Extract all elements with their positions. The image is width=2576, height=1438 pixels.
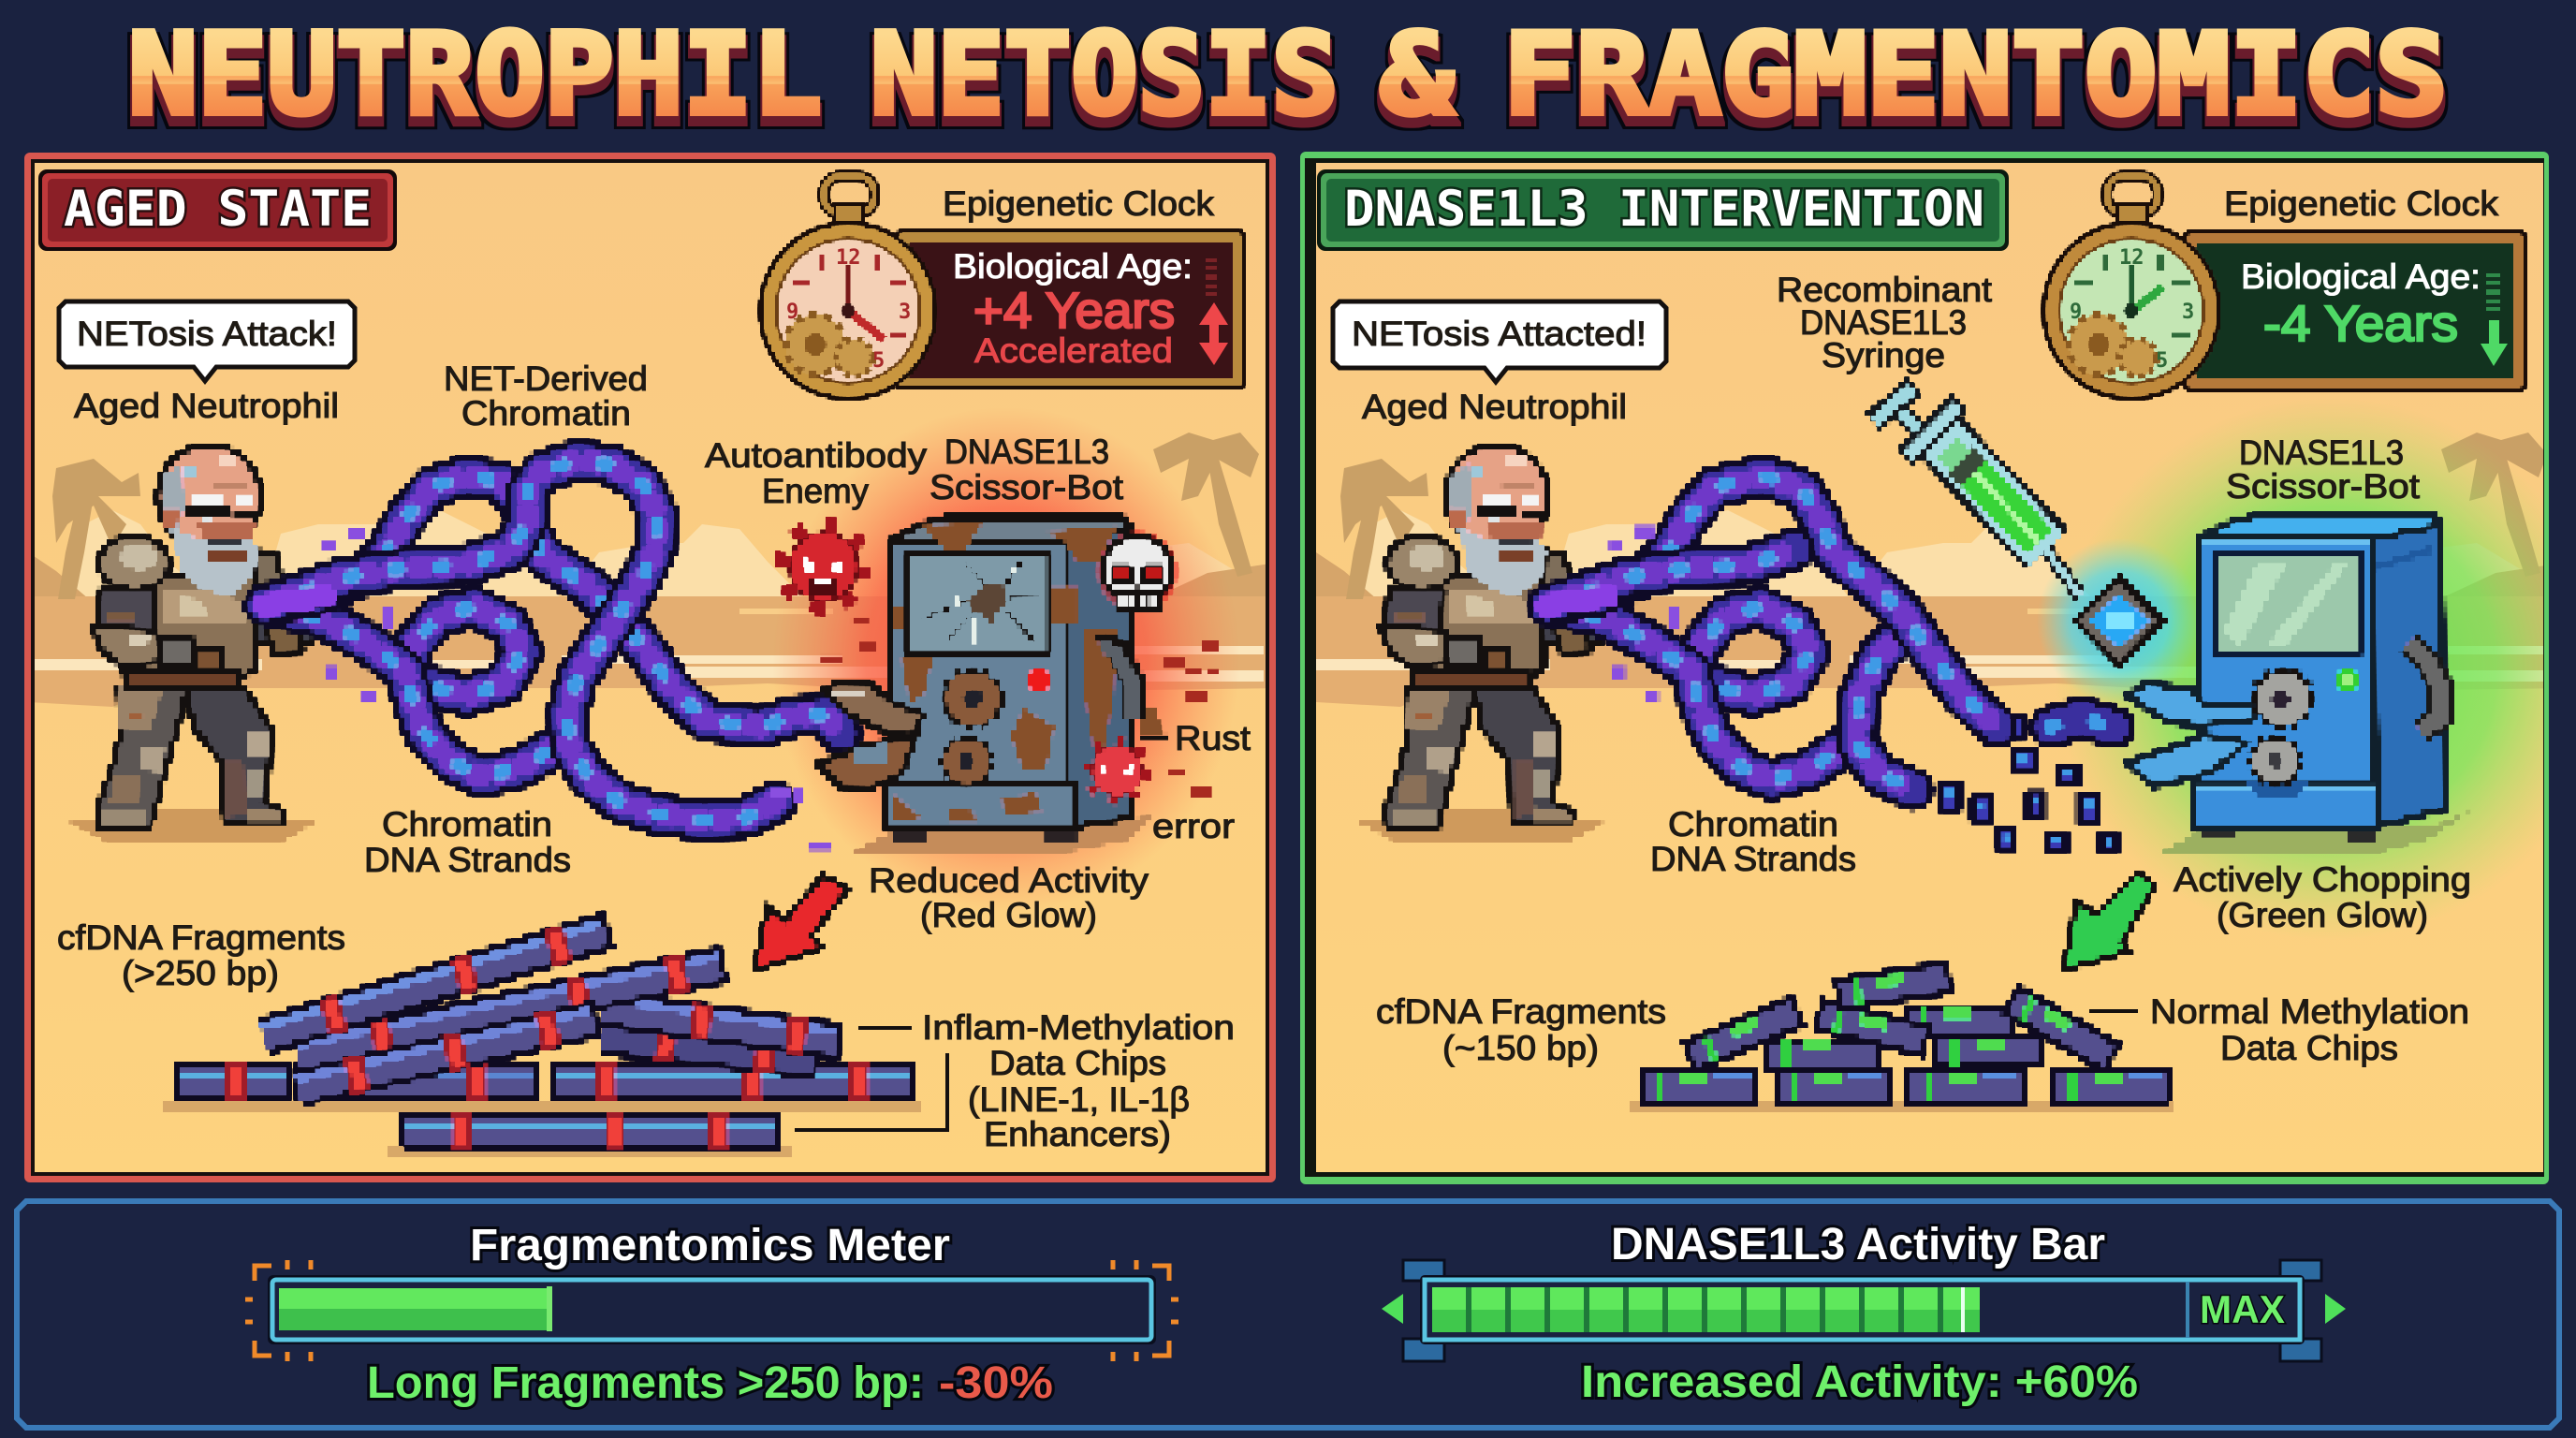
label: biological age right: Biological Age:	[2241, 257, 2481, 296]
fragment row bottom	[173, 1062, 916, 1101]
icon: rejuvenated pocket watch: 5	[2156, 349, 2168, 373]
handle	[1102, 645, 1133, 721]
readout: increased activity: Increased Activity: +60%	[1581, 1357, 2138, 1407]
callout: netosis attack: NETosis Attack!	[77, 315, 337, 353]
panel: aged state	[24, 153, 1282, 1182]
arrow: accelerated	[1199, 302, 1228, 365]
label: epigenetic clock: Epigenetic Clock	[943, 184, 1215, 223]
fragments: long cfDNA pile	[164, 911, 922, 1159]
label: autoantibody enemy	[705, 436, 928, 510]
icon: enzyme crystal	[2076, 579, 2162, 665]
value: plus four years: +4 Years	[973, 283, 1175, 339]
label: reduced activity	[869, 861, 1149, 934]
label: scissor-bot right: DNASE1L3	[2239, 433, 2404, 472]
divider	[2186, 1282, 2189, 1338]
green pointers	[1382, 1294, 1403, 1324]
label: recombinant syringe: Recombinant	[1777, 271, 1993, 309]
title: NETOSIS	[871, 10, 1339, 140]
scene: right desert beach	[1316, 159, 2576, 1180]
label: chromatin dna strands right: DNA Strands	[1650, 840, 1856, 878]
bar track	[1420, 1275, 2305, 1344]
label: rust: Rust	[1175, 719, 1251, 757]
robot: blue scissor-bot	[2128, 517, 2469, 852]
brackets	[245, 1260, 1178, 1361]
arrow: down to long fragments	[754, 875, 847, 970]
icon: rejuvenated pocket watch	[2042, 176, 2526, 401]
label: actively chopping	[2174, 860, 2471, 934]
readout: long fragments: -30%	[939, 1358, 1053, 1408]
label: reduced activity: (Red Glow)	[920, 896, 1097, 934]
icon: aged pocket watch: 5	[872, 349, 885, 373]
enemy: autoantibody virus	[786, 529, 861, 604]
label: inflam-methylation data chips: (LINE-1, IL-1β	[968, 1080, 1190, 1119]
scene: left desert beach	[28, 159, 1282, 1180]
icon: aged pocket watch	[758, 176, 1245, 401]
label: actively chopping: (Green Glow)	[2217, 896, 2428, 934]
skull	[1097, 531, 1178, 611]
label: chromatin dna strands right	[1650, 805, 1856, 878]
cracked screen	[905, 554, 1050, 653]
fragment row bottom	[1638, 1067, 2171, 1107]
character: aged neutrophil right	[1358, 446, 1606, 843]
led	[2335, 668, 2360, 692]
handle	[2408, 643, 2440, 732]
title: FRAGMENTOMICS	[1503, 10, 2448, 140]
badge: dnase1l3 intervention: DNASE1L3 INTERVENTION	[1344, 181, 1984, 238]
label: normal methylation data chips	[2150, 992, 2469, 1067]
arrow: age decrease	[2481, 320, 2508, 366]
heading: activity bar: DNASE1L3 Activity Bar	[1611, 1220, 2105, 1269]
title: NEUTROPHIL	[128, 10, 822, 140]
fragments: short cfDNA pile	[1632, 960, 2174, 1110]
character: aged neutrophil	[70, 446, 318, 843]
label: inflam-methylation data chips: Enhancers)	[984, 1115, 1171, 1153]
callout: netosis attack	[59, 301, 355, 381]
leader lines: methylation chips	[795, 1028, 947, 1130]
label: scissor-bot: Scissor-Bot	[929, 468, 1124, 506]
label: net-derived chromatin	[444, 360, 648, 433]
label: normal methylation data chips: Normal Methylation	[2150, 992, 2469, 1031]
claws	[824, 683, 924, 737]
debris	[822, 617, 1219, 798]
panel: dnase1l3 intervention	[1300, 152, 2576, 1184]
leader line: normal chips	[2089, 1009, 2138, 1013]
badge: dnase1l3 intervention	[1317, 169, 2009, 251]
label: chromatin dna strands: DNA Strands	[364, 841, 571, 879]
bar track	[268, 1275, 1156, 1344]
label: net-derived chromatin: Chromatin	[461, 394, 631, 433]
label: chromatin dna strands: Chromatin	[382, 805, 552, 844]
label: inflam-methylation data chips	[922, 1008, 1235, 1153]
label: cfdna short fragments	[1376, 992, 1666, 1067]
icon: rejuvenated pocket watch: 3	[2182, 301, 2194, 324]
meter: dnase1l3 activity	[1382, 1220, 2346, 1407]
label: scissor-bot right: Scissor-Bot	[2226, 467, 2421, 506]
label: autoantibody enemy: Enemy	[762, 472, 869, 510]
label: biological age: Biological Age:	[953, 247, 1193, 286]
label: aged neutrophil: Aged Neutrophil	[74, 387, 339, 425]
label: recombinant syringe	[1777, 271, 1993, 374]
icon: syringe	[1873, 387, 2080, 595]
label: inflam-methylation data chips: Data Chips	[989, 1044, 1166, 1082]
icon: rejuvenated pocket watch: 9	[2070, 301, 2082, 324]
label: cfdna short fragments: (~150 bp)	[1442, 1029, 1599, 1067]
scissors	[2128, 683, 2253, 726]
label: chromatin dna strands right: Chromatin	[1668, 805, 1838, 844]
label: actively chopping: Actively Chopping	[2174, 860, 2471, 899]
label: inflam-methylation data chips: Inflam-Methylation	[922, 1008, 1235, 1047]
icon: aged pocket watch: 12	[836, 246, 861, 270]
label: error: error	[1152, 807, 1235, 845]
fragment row second	[1681, 960, 2122, 1074]
icon: aged pocket watch: 9	[786, 301, 798, 324]
label: aged neutrophil right: Aged Neutrophil	[1362, 388, 1627, 426]
label: cfdna long fragments: cfDNA Fragments	[57, 918, 345, 957]
label: autoantibody enemy: Autoantibody	[705, 436, 928, 475]
end caps	[1403, 1260, 2321, 1361]
cut fragments	[1942, 718, 2116, 850]
label: normal methylation data chips: Data Chips	[2220, 1029, 2398, 1067]
gears	[944, 669, 1002, 727]
value: minus four years: -4 Years	[2263, 296, 2458, 352]
robot: rusty scissor-bot	[817, 518, 1219, 852]
label: recombinant syringe: DNASE1L3	[1800, 303, 1967, 342]
label: max: MAX	[2200, 1287, 2285, 1331]
label: net-derived chromatin: NET-Derived	[444, 360, 648, 398]
label: scissor-bot: DNASE1L3	[944, 433, 1109, 471]
callout: netosis attacted: NETosis Attacted!	[1352, 315, 1647, 353]
title	[128, 10, 2448, 140]
meter: fragmentomics	[245, 1221, 1178, 1408]
bar fill segments	[1432, 1287, 1980, 1332]
small virus	[1090, 744, 1144, 798]
label: cfdna long fragments	[57, 918, 345, 992]
gears	[2253, 669, 2313, 727]
label: chromatin dna strands	[364, 805, 571, 879]
readout: long fragments: Long Fragments >250 bp:	[367, 1358, 924, 1408]
label: scissor-bot	[929, 433, 1124, 506]
icon: aged pocket watch: 3	[899, 301, 911, 324]
badge: aged state	[38, 169, 397, 251]
illustration group: left	[70, 446, 1219, 1159]
title: &	[1380, 10, 1455, 140]
chromatin strands	[264, 461, 841, 850]
illustration group: right	[1358, 387, 2469, 1110]
badge: aged state: AGED STATE	[64, 181, 372, 238]
label: accelerated: Accelerated	[974, 331, 1173, 370]
arrow: down to short fragments	[2064, 873, 2155, 970]
chromatin strands cut	[1546, 476, 2116, 850]
callout: netosis attacted	[1333, 301, 1666, 382]
bar fill	[279, 1288, 547, 1309]
rust	[892, 522, 1161, 822]
panel: meters	[17, 1201, 2559, 1428]
label: scissor-bot right	[2226, 433, 2421, 506]
tick scale	[1206, 258, 1217, 297]
label: reduced activity: Reduced Activity	[869, 861, 1149, 900]
heading: fragmentomics meter: Fragmentomics Meter	[470, 1221, 950, 1270]
icon: rejuvenated pocket watch: 12	[2119, 246, 2144, 270]
label: cfdna long fragments: (>250 bp)	[122, 954, 279, 992]
label: epigenetic clock right: Epigenetic Clock	[2224, 184, 2499, 223]
label: cfdna short fragments: cfDNA Fragments	[1376, 992, 1666, 1031]
label: recombinant syringe: Syringe	[1822, 336, 1945, 374]
